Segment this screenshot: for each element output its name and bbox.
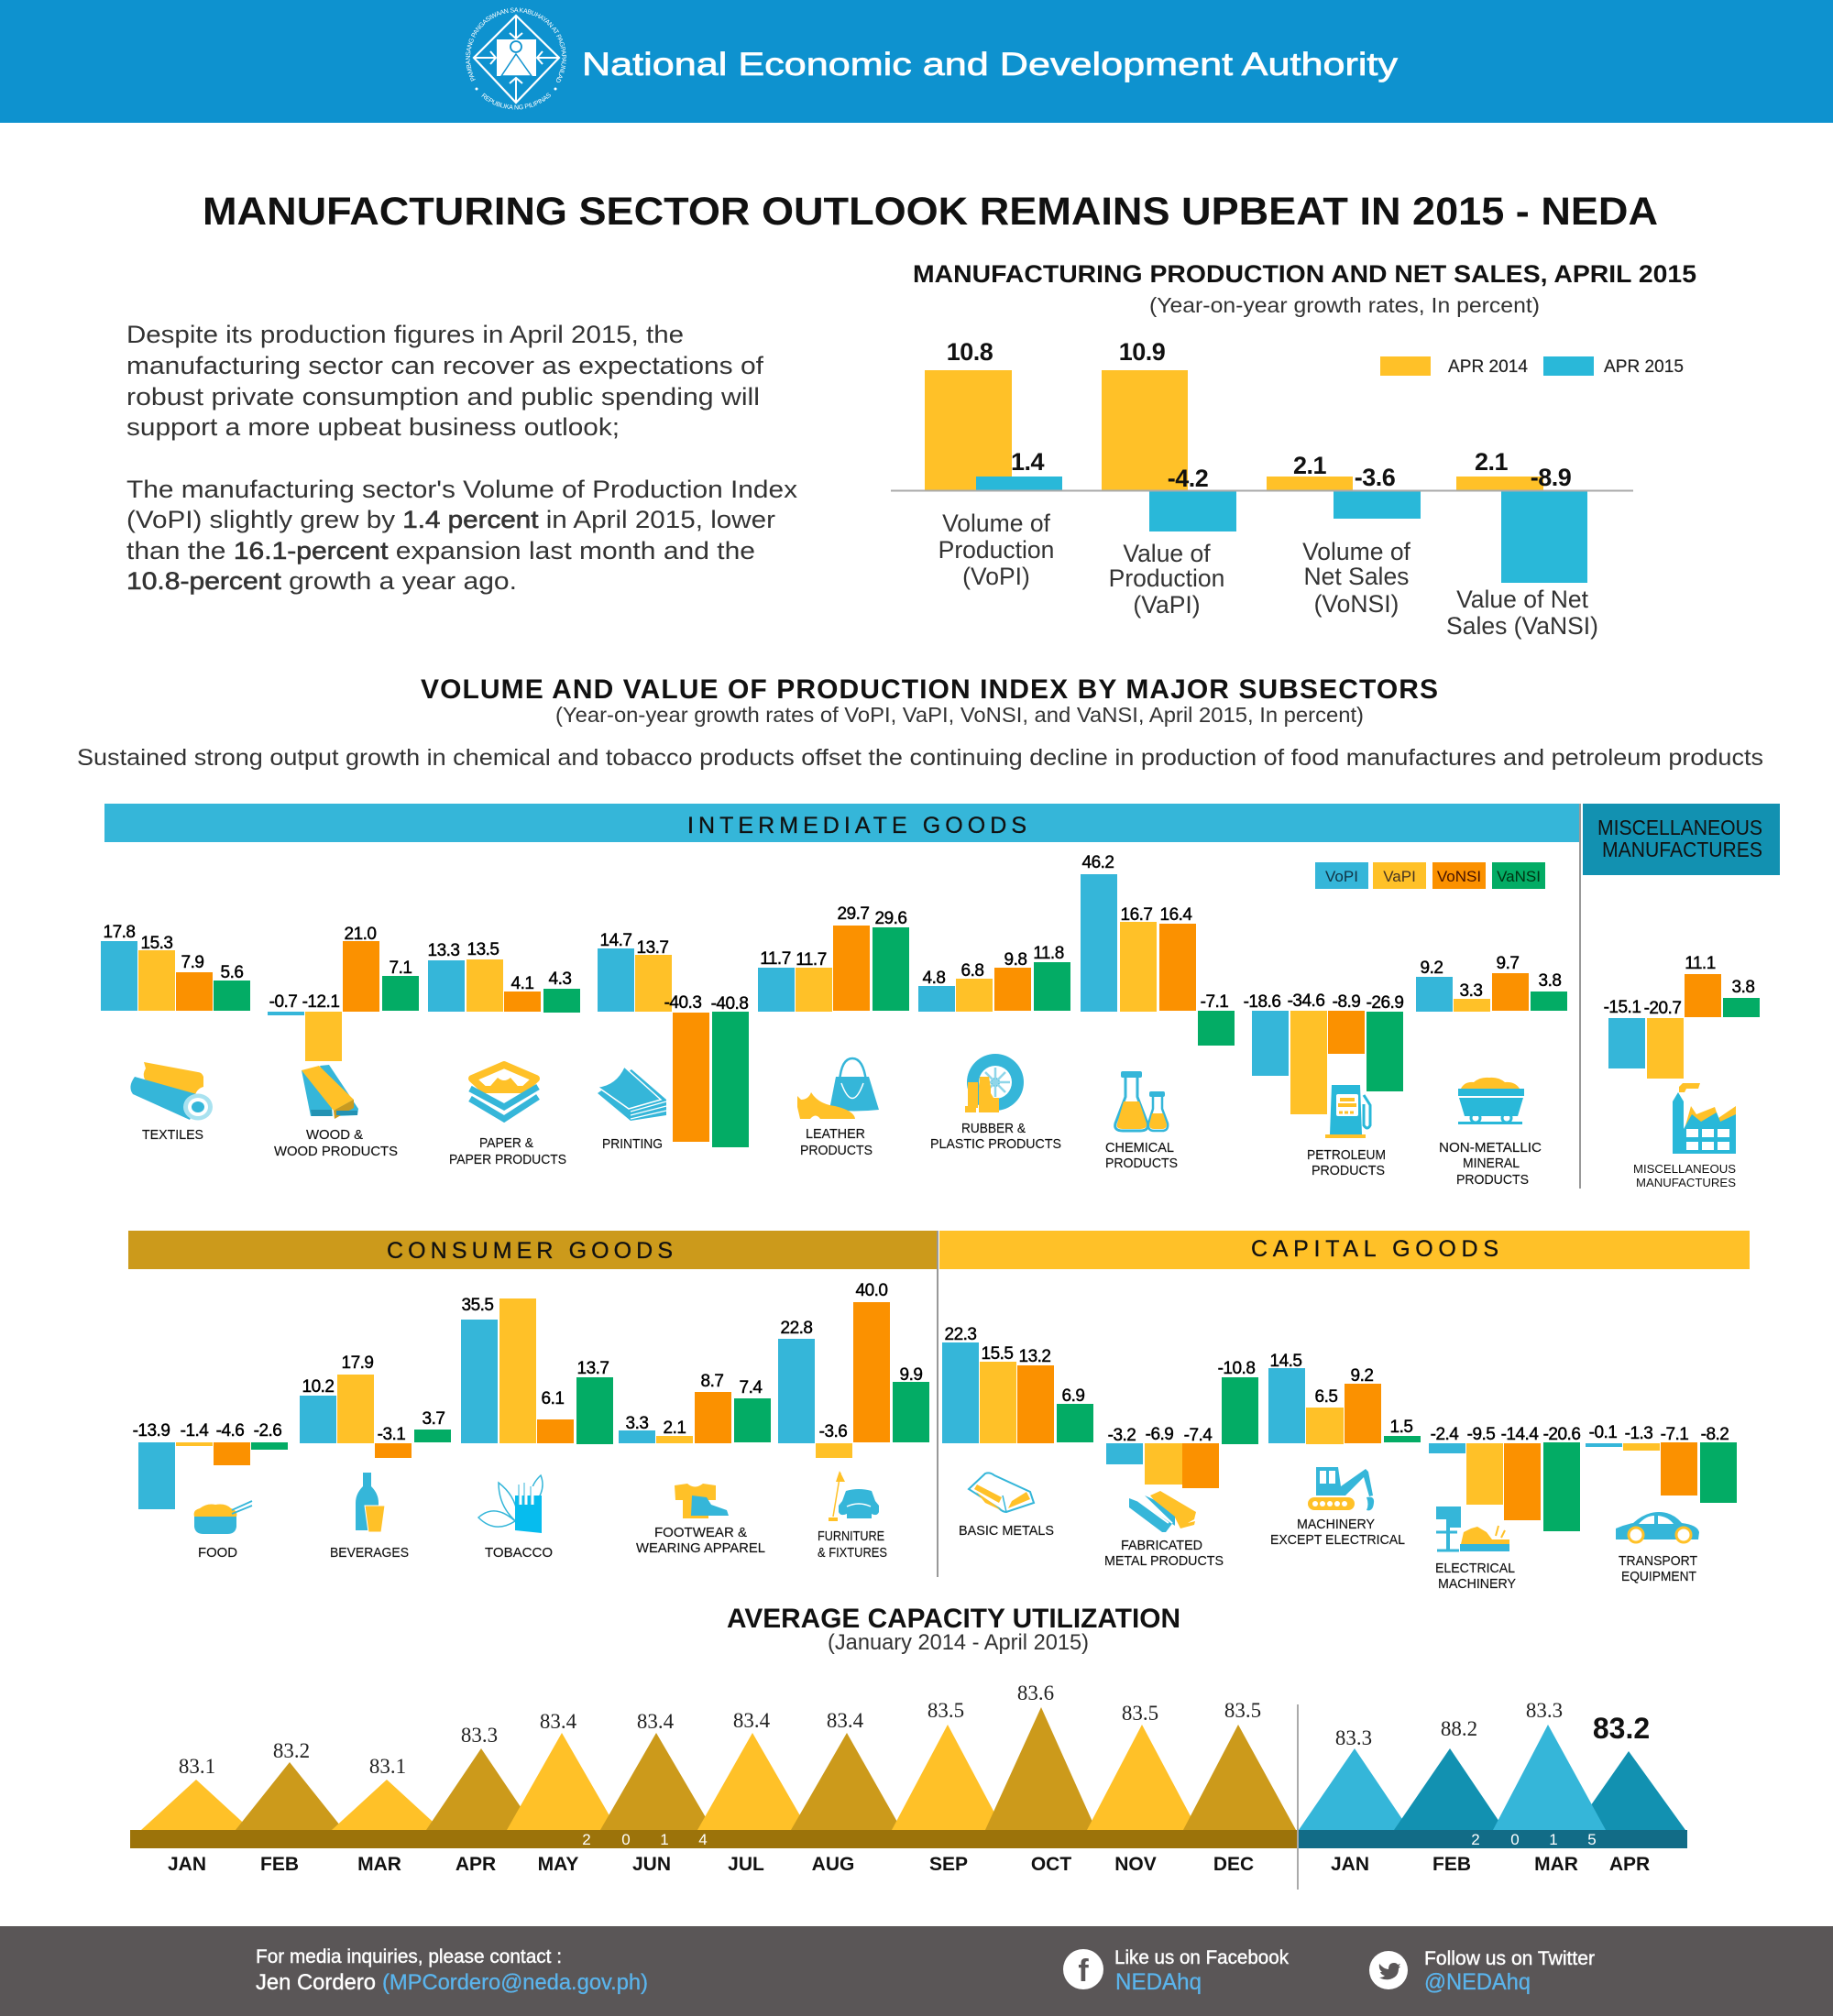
- legend: index colours: [1315, 862, 1545, 889]
- bars: chemical: 46.2: [1082, 853, 1114, 872]
- category labels: [938, 509, 1598, 640]
- label: leather products: [800, 1126, 873, 1158]
- label: petroleum products: [1307, 1147, 1386, 1178]
- label: chemical products: CHEMICAL: [1105, 1140, 1174, 1156]
- bars: fabricated metal: -6.9: [1146, 1425, 1173, 1444]
- bars: electrical machinery: [1429, 1425, 1580, 1531]
- capacity values: 83.3: [1526, 1699, 1563, 1722]
- label: footwear and wearing apparel: [636, 1525, 765, 1556]
- month labels: [168, 1854, 1650, 1875]
- label: miscellaneous manufactures: MANUFACTURES: [1636, 1176, 1736, 1189]
- icon: mining cart: [1458, 1078, 1524, 1124]
- bars: petroleum: [1244, 992, 1403, 1114]
- legend: index colours: VaPI: [1383, 868, 1416, 885]
- category labels: (VoNSI): [1314, 590, 1399, 618]
- bars: food: [133, 1421, 288, 1509]
- icon: paper stack: [470, 1065, 538, 1119]
- label: transport equipment: EQUIPMENT: [1621, 1569, 1696, 1584]
- icon: excavator: [1308, 1467, 1374, 1510]
- bars: footwear and apparel: 8.7: [701, 1372, 723, 1391]
- icon: handbag and shoe: [797, 1058, 879, 1119]
- legend: APR 2014 and APR 2015: APR 2014: [1448, 357, 1528, 377]
- text block: intro paragraphs: robust private consumption and public spending will: [126, 383, 760, 411]
- label: fabricated metal products: FABRICATED: [1121, 1538, 1202, 1553]
- bar chart: April 2014 vs April 2015: 1.4: [1011, 448, 1044, 476]
- bars: paper: 13.5: [467, 940, 499, 959]
- bar chart: April 2014 vs April 2015: 10.9: [1119, 338, 1166, 366]
- label: wood and wood products: [274, 1127, 398, 1159]
- bars: wood: [268, 925, 419, 1061]
- month labels: JAN: [1331, 1854, 1369, 1875]
- label: transport equipment: [1619, 1553, 1697, 1584]
- bars: food: -2.6: [254, 1421, 281, 1441]
- icon: twitter: [1369, 1951, 1408, 1989]
- bars: petroleum: -26.9: [1367, 993, 1403, 1013]
- label: fabricated metal products: METAL PRODUCTS: [1104, 1553, 1224, 1569]
- capacity values: 83.5: [927, 1699, 964, 1722]
- label: footwear and wearing apparel: WEARING APPAREL: [636, 1540, 765, 1556]
- bars: leather: 29.7: [838, 904, 869, 924]
- icon: metal ingot: [969, 1473, 1034, 1512]
- month labels: MAR: [357, 1854, 401, 1875]
- label: petroleum products: PETROLEUM: [1307, 1147, 1386, 1163]
- heading box: miscellaneous manufactures: MISCELLANEOUS: [1597, 816, 1762, 839]
- category labels: Sales (VaNSI): [1446, 612, 1598, 640]
- capacity values: 83.6: [1017, 1682, 1054, 1704]
- bars: footwear and apparel: [619, 1372, 771, 1443]
- bars: paper: 13.3: [428, 941, 459, 960]
- bar chart: April 2014 vs April 2015: 2.1: [1475, 448, 1508, 476]
- icon: petrol pump: [1325, 1085, 1370, 1138]
- title: MANUFACTURING SECTOR OUTLOOK REMAINS UPBEAT IN 2015 - NEDA: [203, 190, 1658, 234]
- bars: textiles: 7.9: [181, 953, 203, 972]
- bars: petroleum: -8.9: [1333, 992, 1360, 1012]
- label: non-metallic mineral products: [1439, 1140, 1542, 1188]
- label: chemical products: PRODUCTS: [1105, 1156, 1178, 1171]
- month labels: NOV: [1114, 1854, 1157, 1875]
- heading: production and net sales: MANUFACTURING PRODUCTION AND NET SALES, APRIL 2015: [913, 260, 1696, 288]
- bars: miscellaneous: -15.1: [1604, 998, 1641, 1017]
- category labels: Value of Net: [1456, 586, 1589, 613]
- bars: leather: 11.7: [796, 950, 827, 970]
- category labels: Production: [938, 536, 1054, 564]
- text block: intro paragraphs: support a more upbeat business outlook;: [126, 413, 620, 441]
- label: petroleum products: PRODUCTS: [1312, 1163, 1385, 1178]
- panel: intermediate goods: [101, 804, 1579, 1188]
- category labels: (VoPI): [962, 563, 1030, 590]
- panel: average capacity utilization: [130, 1604, 1687, 1890]
- month labels: FEB: [260, 1854, 299, 1875]
- month labels: FEB: [1432, 1854, 1471, 1875]
- label: furniture and fixtures: [818, 1528, 887, 1561]
- label: machinery except electrical: EXCEPT ELECTRICAL: [1270, 1532, 1405, 1548]
- label: miscellaneous manufactures: MISCELLANEOUS: [1633, 1162, 1736, 1176]
- subheading: growth rates note: (Year-on-year growth rates, In percent): [1149, 293, 1540, 317]
- label: chemical products: [1105, 1140, 1178, 1171]
- bars: non-metallic mineral: 9.2: [1421, 959, 1443, 978]
- bars: food: -4.6: [216, 1421, 244, 1441]
- timeline bar: 2014: 4: [698, 1831, 708, 1848]
- icon: tobacco leaves and pack: [478, 1475, 543, 1533]
- legend: index colours: VoNSI: [1437, 868, 1481, 885]
- label: beverages: BEVERAGES: [330, 1545, 409, 1561]
- bars: miscellaneous: 3.8: [1732, 978, 1754, 997]
- bars: beverages: 3.7: [423, 1409, 445, 1429]
- label: electrical machinery: MACHINERY: [1438, 1576, 1516, 1592]
- bars: rubber and plastic: 6.8: [961, 961, 983, 981]
- bars: fabricated metal: [1106, 1359, 1258, 1488]
- bars: beverages: [300, 1353, 451, 1458]
- label: furniture and fixtures: & FIXTURES: [818, 1545, 887, 1561]
- label: furniture and fixtures: FURNITURE: [818, 1528, 884, 1544]
- heading bar: consumer goods: [128, 1231, 938, 1269]
- bars: paper: 4.1: [511, 974, 533, 993]
- month labels: JUN: [632, 1854, 671, 1875]
- bars: electrical machinery: -9.5: [1467, 1425, 1495, 1444]
- capacity values: 83.4: [827, 1709, 864, 1732]
- bar chart: April 2014 vs April 2015: -4.2: [1168, 465, 1208, 492]
- capacity values: 83.1: [369, 1755, 406, 1778]
- icon: printed book: [598, 1067, 666, 1121]
- bar chart: April 2014 vs April 2015: 2.1: [1293, 452, 1326, 479]
- twitter contact: @NEDAhq: [1424, 1969, 1531, 1995]
- icon: steel beams: [1129, 1491, 1196, 1532]
- bars: beverages: 17.9: [342, 1353, 373, 1373]
- bars: transport equipment: -1.3: [1625, 1424, 1652, 1443]
- label: rubber and plastic products: [930, 1121, 1061, 1152]
- facebook contact: Like us on Facebook: [1114, 1947, 1289, 1968]
- bars: machinery: 6.5: [1315, 1387, 1337, 1407]
- bars: tobacco: 6.1: [542, 1389, 564, 1408]
- bars: non-metallic mineral: 9.7: [1497, 954, 1519, 973]
- bars: tobacco: 35.5: [462, 1296, 493, 1315]
- bars: basic metals: 6.9: [1062, 1386, 1084, 1406]
- heading bar: consumer goods: CONSUMER GOODS: [387, 1238, 673, 1264]
- bars: wood: -0.7: [269, 992, 297, 1012]
- bars: furniture: 40.0: [856, 1281, 887, 1300]
- category labels: Net Sales: [1304, 563, 1409, 590]
- panel: capital goods: [937, 1231, 1750, 1592]
- triangle chart: 2015 months: [1299, 1725, 1685, 1830]
- icon: facebook: [1063, 1949, 1103, 1989]
- bars: fabricated metal: -7.4: [1184, 1426, 1213, 1445]
- category labels: Volume of: [1302, 538, 1411, 565]
- bars: chemical: [1081, 853, 1235, 1046]
- icon: rice bowl: [194, 1501, 252, 1534]
- capacity values: 83.2: [273, 1739, 310, 1762]
- bars: beverages: -3.1: [378, 1425, 405, 1444]
- label: paper and paper products: PAPER PRODUCTS: [449, 1152, 566, 1167]
- heading: production index by major subsectors: [77, 674, 1763, 771]
- label: printing: PRINTING: [602, 1136, 663, 1152]
- heading bar: intermediate goods: INTERMEDIATE GOODS: [687, 813, 1026, 838]
- capacity values: 83.5: [1224, 1699, 1261, 1722]
- heading box: miscellaneous manufactures: [1583, 804, 1780, 875]
- footer: [0, 1926, 1833, 2016]
- bars: tobacco: [461, 1296, 613, 1444]
- month labels: SEP: [929, 1854, 968, 1875]
- bars: miscellaneous: 11.1: [1685, 954, 1716, 973]
- capacity values: 83.1: [179, 1755, 215, 1778]
- label: basic metals: BASIC METALS: [959, 1523, 1054, 1539]
- label: paper and paper products: [449, 1135, 566, 1167]
- bars: furniture: 9.9: [900, 1365, 922, 1385]
- month labels: APR: [1609, 1854, 1650, 1875]
- label: wood and wood products: WOOD &: [306, 1127, 363, 1143]
- bars: transport equipment: -7.1: [1661, 1425, 1688, 1444]
- bars: footwear and apparel: 3.3: [626, 1414, 648, 1433]
- twitter contact: [1424, 1948, 1595, 1995]
- bars: paper: 4.3: [549, 970, 571, 989]
- bars: fabricated metal: -3.2: [1108, 1426, 1136, 1445]
- capacity values: 83.5: [1122, 1702, 1158, 1725]
- capacity values: 83.3: [461, 1724, 498, 1747]
- bars: wood: 21.0: [345, 925, 376, 944]
- bars: wood: 7.1: [390, 959, 412, 978]
- capacity values: 83.3: [1335, 1726, 1372, 1749]
- facebook contact: [1114, 1947, 1289, 1995]
- bars: furniture: -3.6: [819, 1422, 847, 1441]
- heading bar: capital goods: [939, 1231, 1750, 1269]
- media contact: For media inquiries, please contact :: [256, 1946, 562, 1967]
- triangle chart: 2014 months: [141, 1707, 1296, 1830]
- label: electrical machinery: [1435, 1561, 1516, 1592]
- bars: transport equipment: -0.1: [1589, 1423, 1617, 1442]
- capacity values: 83.4: [540, 1710, 577, 1733]
- bars: transport equipment: [1586, 1423, 1737, 1503]
- timeline bar: 2014: 1: [660, 1831, 669, 1848]
- bars: basic metals: 15.5: [982, 1344, 1013, 1364]
- label: paper and paper products: PAPER &: [479, 1135, 533, 1151]
- bars: footwear and apparel: 2.1: [664, 1419, 686, 1438]
- heading box: miscellaneous manufactures: MANUFACTURES: [1602, 838, 1762, 861]
- bars: rubber and plastic: [918, 944, 1070, 1012]
- label: non-metallic mineral products: MINERAL: [1463, 1156, 1520, 1171]
- legend: APR 2014 and APR 2015: [1380, 356, 1684, 377]
- bars: electrical machinery: -2.4: [1431, 1425, 1459, 1444]
- twitter contact: Follow us on Twitter: [1424, 1948, 1595, 1969]
- subheading: date range: (January 2014 - April 2015): [828, 1630, 1089, 1655]
- label: machinery except electrical: MACHINERY: [1297, 1517, 1375, 1532]
- bars: wood: -12.1: [302, 992, 339, 1012]
- bars: printing: 13.7: [637, 938, 668, 958]
- bars: chemical: -7.1: [1201, 992, 1228, 1012]
- bars: food: -13.9: [133, 1421, 170, 1441]
- month labels: AUG: [812, 1854, 854, 1875]
- icon: shirt and boot: [675, 1484, 729, 1518]
- bars: chemical: 16.4: [1160, 905, 1192, 925]
- header banner: [0, 0, 1833, 123]
- legend: APR 2014 and APR 2015: APR 2015: [1604, 357, 1684, 377]
- media contact: Jen Cordero: [256, 1970, 376, 1995]
- icon: bottle and glass: [356, 1473, 385, 1532]
- text block: intro paragraphs: [126, 321, 798, 595]
- timeline bar: 2015: [1298, 1830, 1687, 1848]
- bars: basic metals: 13.2: [1019, 1347, 1050, 1366]
- bar chart: April 2014 vs April 2015: -8.9: [1531, 464, 1572, 491]
- bars: chemical: 16.7: [1121, 905, 1152, 925]
- label: wood and wood products: WOOD PRODUCTS: [274, 1144, 398, 1159]
- label: miscellaneous manufactures: [1633, 1162, 1736, 1189]
- bars: basic metals: [942, 1325, 1093, 1443]
- bar chart: April 2014 vs April 2015: 10.8: [947, 338, 993, 366]
- capacity values: 83.4: [733, 1709, 771, 1732]
- timeline bar: 2014: 2: [582, 1831, 591, 1848]
- icon: armchair and lamp: [829, 1471, 879, 1521]
- panel: manufacturing production and net sales: [891, 260, 1696, 640]
- heading bar: intermediate goods: [104, 804, 1579, 842]
- bars: machinery: 14.5: [1270, 1352, 1301, 1371]
- month labels: OCT: [1031, 1854, 1071, 1875]
- label: food: FOOD: [198, 1545, 237, 1561]
- timeline bar: 2015: 1: [1549, 1831, 1558, 1848]
- bars: rubber and plastic: 11.8: [1033, 944, 1064, 963]
- capacity values: 88.2: [1441, 1717, 1477, 1740]
- heading: production index by major subsectors: VOLUME AND VALUE OF PRODUCTION INDEX BY MAJOR SUBSECTORS: [421, 674, 1438, 705]
- label: electrical machinery: ELECTRICAL: [1435, 1561, 1515, 1576]
- bars: transport equipment: -8.2: [1701, 1425, 1729, 1444]
- icon: facebook: f: [1078, 1954, 1089, 1989]
- capacity values: 83.2: [1593, 1712, 1650, 1745]
- bar chart: April 2014 vs April 2015: -3.6: [1355, 464, 1396, 491]
- bars: leather: 29.6: [875, 909, 906, 928]
- bars: electrical machinery: -20.6: [1543, 1425, 1580, 1444]
- icon: car: [1616, 1512, 1699, 1542]
- timeline bar: 2015: 0: [1510, 1831, 1520, 1848]
- bars: tobacco: 13.7: [577, 1359, 609, 1378]
- category labels: (VaPI): [1133, 591, 1201, 619]
- bars: basic metals: 22.3: [945, 1325, 976, 1344]
- legend: index colours: VaNSI: [1497, 868, 1541, 885]
- timeline bar: 2014: [130, 1830, 1297, 1848]
- bars: fabricated metal: -10.8: [1218, 1359, 1255, 1378]
- icon: tire and plastic bottles: [965, 1054, 1024, 1112]
- subheading: subsector growth note: (Year-on-year growth rates of VoPI, VaPI, VoNSI, and VaNSI, April 2015, In percent): [555, 703, 1364, 727]
- bars: textiles: [101, 923, 250, 1011]
- label: non-metallic mineral products: PRODUCTS: [1456, 1172, 1529, 1188]
- bars: rubber and plastic: 9.8: [1004, 950, 1026, 970]
- text block: intro paragraphs: (VoPI) slightly grew by 1.4 percent in April 2015, lower: [126, 506, 775, 533]
- label: fabricated metal products: [1104, 1538, 1224, 1569]
- text block: intro paragraphs: Despite its production figures in April 2015, the: [126, 321, 684, 348]
- bars: footwear and apparel: 7.4: [740, 1378, 763, 1397]
- month labels: MAY: [538, 1854, 578, 1875]
- text block: intro paragraphs: 10.8-percent growth a year ago.: [126, 567, 517, 595]
- facebook contact: NEDAhq: [1115, 1969, 1202, 1995]
- text block: intro paragraphs: The manufacturing sector's Volume of Production Index: [126, 476, 798, 503]
- header organisation name: National Economic and Development Authority: [582, 47, 1399, 82]
- label: leather products: PRODUCTS: [800, 1143, 873, 1158]
- bars: miscellaneous: [1604, 954, 1760, 1079]
- bars: furniture: 22.8: [781, 1319, 812, 1338]
- label: machinery except electrical: [1270, 1517, 1405, 1548]
- timeline bar: 2015: 5: [1587, 1831, 1597, 1848]
- bars: printing: 14.7: [600, 931, 631, 950]
- bars: food: -1.4: [181, 1421, 209, 1441]
- bars: rubber and plastic: 4.8: [923, 969, 945, 988]
- heading bar: capital goods: CAPITAL GOODS: [1251, 1236, 1498, 1262]
- label: leather products: LEATHER: [806, 1126, 865, 1142]
- capacity values: 83.4: [637, 1710, 675, 1733]
- category labels: Production: [1109, 564, 1224, 592]
- label: textiles: TEXTILES: [142, 1127, 203, 1143]
- month labels: JAN: [168, 1854, 206, 1875]
- bars: furniture: [778, 1281, 929, 1458]
- category labels: Value of: [1123, 540, 1211, 567]
- bars: non-metallic mineral: 3.8: [1539, 971, 1561, 991]
- month labels: APR: [456, 1854, 496, 1875]
- label: footwear and wearing apparel: FOOTWEAR &: [654, 1525, 747, 1540]
- bars: miscellaneous: -20.7: [1644, 999, 1681, 1018]
- bars: electrical machinery: -14.4: [1501, 1425, 1539, 1444]
- heading: capacity utilization: AVERAGE CAPACITY UTILIZATION: [727, 1604, 1180, 1634]
- bars: machinery: [1268, 1352, 1421, 1444]
- bars: machinery: 1.5: [1390, 1418, 1412, 1437]
- month labels: MAR: [1534, 1854, 1578, 1875]
- category labels: Volume of: [942, 509, 1051, 537]
- bars: beverages: 10.2: [302, 1377, 334, 1397]
- bars: printing: -40.3: [664, 993, 701, 1013]
- icon: textile roll: [130, 1062, 213, 1120]
- label: rubber and plastic products: RUBBER &: [961, 1121, 1026, 1136]
- icon: wood planks: [302, 1065, 358, 1119]
- icon: factory: [1673, 1083, 1736, 1154]
- bars: printing: -40.8: [711, 994, 748, 1013]
- timeline bar: 2015: 2: [1471, 1831, 1480, 1848]
- icon: NEDA logo seal: REPUBLIKA NG PILIPINAS: [481, 93, 551, 110]
- month labels: DEC: [1213, 1854, 1254, 1875]
- label: rubber and plastic products: PLASTIC PRODUCTS: [930, 1136, 1061, 1152]
- bar chart: April 2014 vs April 2015: [891, 338, 1633, 583]
- bars: printing: [598, 931, 749, 1147]
- icon: chemical flasks: [1115, 1071, 1168, 1131]
- label: transport equipment: TRANSPORT: [1619, 1553, 1697, 1569]
- text block: intro paragraphs: manufacturing sector can recover as expectations of: [126, 352, 764, 379]
- bars: leather: 11.7: [760, 949, 791, 969]
- label: tobacco: TOBACCO: [485, 1545, 553, 1561]
- bars: machinery: 9.2: [1351, 1366, 1373, 1386]
- panel: miscellaneous manufactures: [1579, 804, 1780, 1189]
- bars: textiles: 17.8: [104, 923, 135, 942]
- bars: non-metallic mineral: 3.3: [1460, 981, 1482, 1001]
- legend: index colours: VoPI: [1325, 868, 1358, 885]
- bars: paper: [428, 940, 580, 1013]
- icon: drill press and saw: [1436, 1507, 1509, 1551]
- text block: intro paragraphs: than the 16.1-percent expansion last month and the: [126, 537, 755, 564]
- bars: petroleum: -18.6: [1244, 992, 1280, 1012]
- bars: leather: [758, 904, 909, 1012]
- bars: textiles: 15.3: [141, 934, 172, 953]
- month labels: JUL: [728, 1854, 764, 1875]
- label: non-metallic mineral products: NON-METALLIC: [1439, 1140, 1542, 1156]
- media contact: (MPCordero@neda.gov.ph): [382, 1970, 648, 1995]
- summary sentence: Sustained strong output growth in chemical and tobacco products offset the continuing decline in production of food manufactures and petroleum products: [77, 745, 1763, 771]
- icon: NEDA logo seal: PAMBANSANG PANGASIWAAN SA KABUHAYAN AT PAGPAPAUNLAD: [466, 7, 566, 82]
- bars: petroleum: -34.6: [1288, 992, 1324, 1011]
- bars: non-metallic mineral: [1416, 954, 1567, 1012]
- media contact: [256, 1946, 648, 1995]
- capacity values: [179, 1682, 1650, 1778]
- bars: textiles: 5.6: [221, 963, 243, 982]
- timeline bar: 2014: 0: [621, 1831, 631, 1848]
- panel: consumer goods: [128, 1231, 938, 1561]
